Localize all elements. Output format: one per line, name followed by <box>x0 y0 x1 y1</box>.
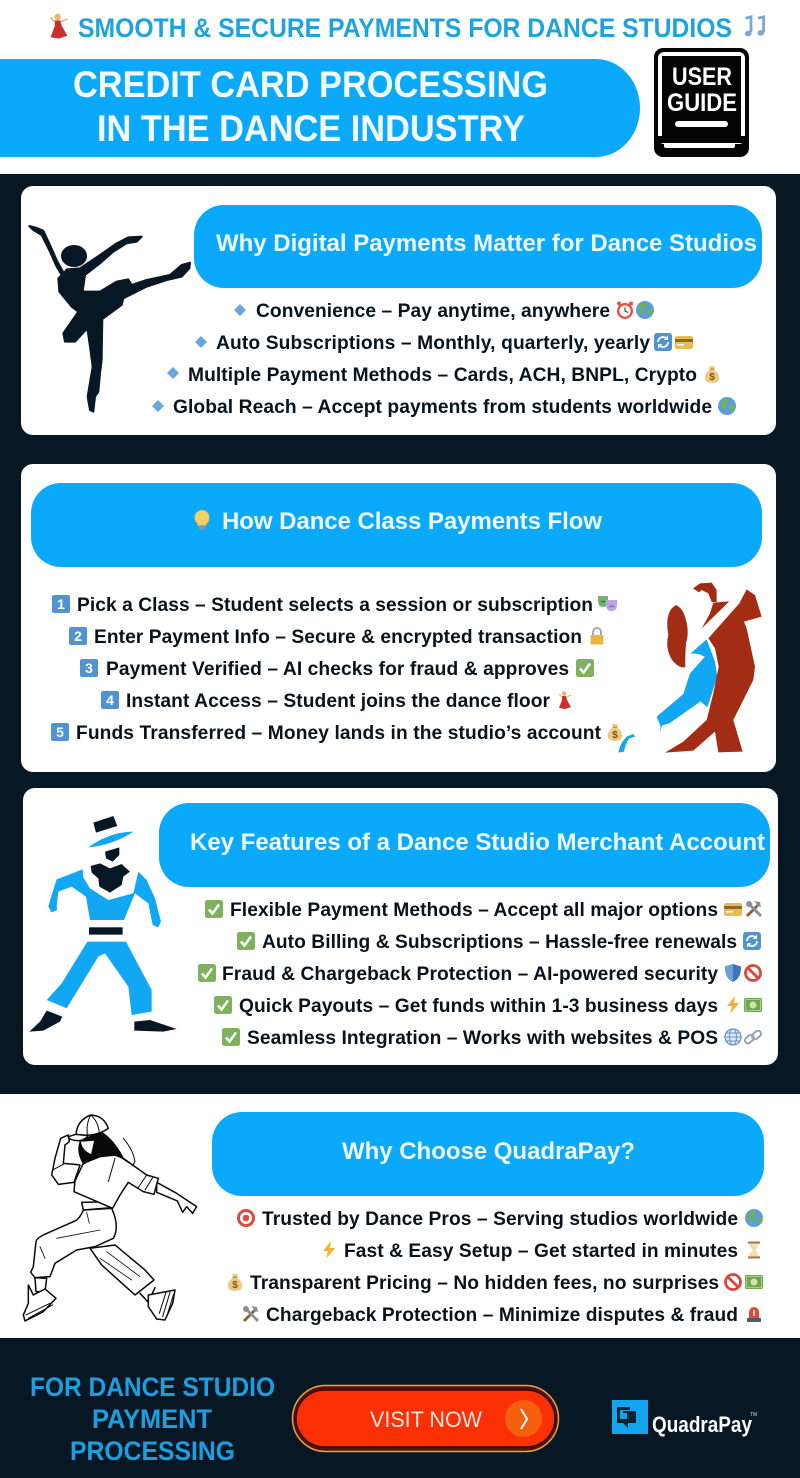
icon: dancer with hat <box>29 816 177 1032</box>
panel: key features <box>23 788 778 1065</box>
icon: tango dancers <box>618 583 762 753</box>
list item: chargeback: Chargeback Protection – Minimize disputes & fraud <box>266 1305 738 1326</box>
heading pill: How Dance Class Payments Flow <box>222 508 602 535</box>
list item: convenience: Convenience – Pay anytime, anywhere <box>256 301 610 322</box>
list item: auto subscriptions: Auto Subscriptions – Monthly, quarterly, yearly <box>216 333 650 354</box>
list item: step 1: Pick a Class – Student selects a session or subscription <box>77 595 593 616</box>
list item: fraud protection: Fraud & Chargeback Protection – AI-powered security <box>222 964 718 985</box>
list item: step 2: Enter Payment Info – Secure & encrypted transaction <box>94 627 582 648</box>
footer call to action text <box>30 1372 275 1466</box>
visit now button: VISIT NOW <box>370 1407 482 1432</box>
subtitle with dancer and music icons: SMOOTH & SECURE PAYMENTS FOR DANCE STUDIOS <box>78 13 732 43</box>
list item: trusted: Trusted by Dance Pros – Serving studios worldwide <box>262 1209 738 1230</box>
list item: step 3: 3 <box>85 660 93 676</box>
list item: step 2: 2 <box>74 628 82 644</box>
heading pill <box>159 803 770 887</box>
footer call to action text: FOR DANCE STUDIO <box>30 1372 275 1402</box>
list item: step 1: 1 <box>57 596 65 612</box>
list item: multiple payment methods: Multiple Payment Methods – Cards, ACH, BNPL, Crypto <box>188 365 697 386</box>
list item: pricing: Transparent Pricing – No hidden fees, no surprises <box>250 1273 719 1294</box>
footer call to action text: PROCESSING <box>70 1436 235 1466</box>
panel: why digital payments matter <box>21 186 776 435</box>
list item: step 3: Payment Verified – AI checks for fraud & approves <box>106 659 569 680</box>
list item: flexible payment methods: Flexible Payment Methods – Accept all major options <box>230 900 718 921</box>
list item: step 5: 5 <box>56 724 64 740</box>
icon: hip-hop dancer line art <box>23 1115 197 1321</box>
heading pill <box>31 483 762 567</box>
QuadraPay logo: TM <box>750 1412 757 1418</box>
list item: setup: Fast & Easy Setup – Get started in minutes <box>344 1241 738 1262</box>
header area <box>0 0 800 174</box>
heading pill: Key Features of a Dance Studio Merchant Account <box>190 829 765 856</box>
heading pill <box>212 1112 764 1196</box>
heading pill: Why Choose QuadraPay? <box>342 1138 635 1165</box>
footer <box>30 1372 757 1466</box>
icon: user guide book <box>654 48 749 157</box>
QuadraPay logo <box>612 1400 757 1437</box>
icon: user guide book: GUIDE <box>667 89 737 117</box>
icon: user guide book: USER <box>672 63 732 91</box>
footer call to action text: PAYMENT <box>92 1404 212 1434</box>
heading pill <box>194 205 762 288</box>
visit now button <box>292 1386 558 1452</box>
list item: quick payouts: Quick Payouts – Get funds within 1-3 business days <box>239 996 718 1017</box>
list item: step 4: 4 <box>106 692 114 708</box>
title banner: IN THE DANCE INDUSTRY <box>97 108 525 149</box>
list item: seamless integration: Seamless Integration – Works with websites & POS <box>247 1028 718 1049</box>
panel: why choose quadrapay <box>0 1094 800 1338</box>
panel: how dance class payments flow <box>21 464 776 772</box>
list item: step 4: Instant Access – Student joins the dance floor <box>126 691 551 712</box>
heading pill: Why Digital Payments Matter for Dance Studios <box>216 230 757 257</box>
list item: global reach: Global Reach – Accept payments from students worldwide <box>173 397 712 418</box>
title banner <box>0 59 640 157</box>
QuadraPay logo: QuadraPay <box>652 1412 753 1437</box>
title banner: CREDIT CARD PROCESSING <box>73 64 548 105</box>
icon: ballerina silhouette <box>29 226 190 412</box>
list item: auto billing: Auto Billing & Subscriptions – Hassle-free renewals <box>262 932 737 953</box>
list item: step 5: Funds Transferred – Money lands in the studio’s account <box>76 723 602 744</box>
